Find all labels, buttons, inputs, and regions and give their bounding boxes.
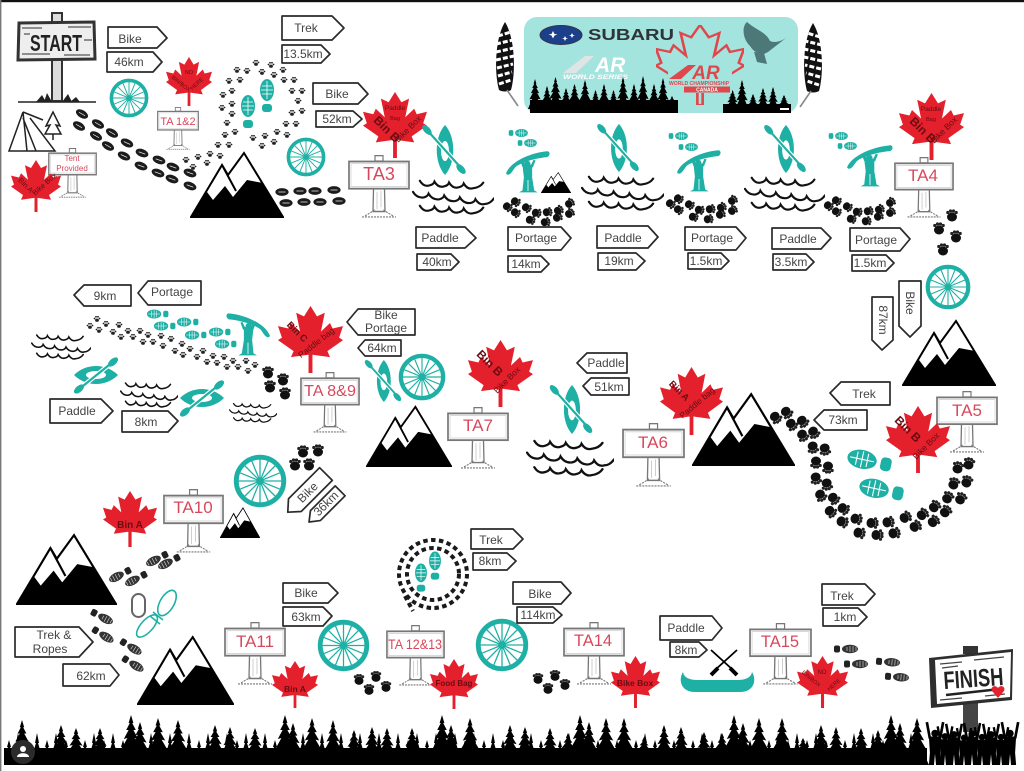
sign: paddle [416, 227, 476, 248]
mountain [137, 637, 234, 705]
maple leaf: bike box [611, 656, 660, 708]
logo banner: WORLD SERIES [563, 75, 628, 81]
sign: 1.5km [688, 253, 729, 269]
sign: 114km [517, 607, 562, 623]
TA6 sign: TA6 [638, 433, 668, 452]
sign: portage left: Portage [151, 285, 193, 299]
TA3 sign: TA3 [363, 164, 395, 184]
icon: bike wheel [401, 356, 443, 398]
sign: trek and ropes [15, 627, 93, 657]
sign: bike diagonal [281, 468, 332, 519]
kayak 1 [421, 123, 467, 176]
portager 3 [847, 145, 893, 186]
sign: 9km left [74, 285, 131, 306]
logo banner: CANADA [696, 88, 718, 94]
sign: paddle: Paddle [779, 232, 817, 246]
sign: 62km: 62km [76, 669, 106, 683]
sign: bike: Bike [528, 587, 552, 601]
sign: 51km left [583, 378, 629, 395]
TA4 sign: TA4 [908, 166, 938, 185]
TA14 sign [564, 623, 624, 684]
maple leaf: TA4 bins: Paddle [921, 106, 941, 113]
sign: 52km [316, 111, 362, 127]
small teal prints 3 [829, 132, 857, 150]
sign: trek [822, 584, 875, 605]
TA 8&9 sign [301, 373, 359, 432]
sign: portage [508, 227, 571, 250]
waves [230, 404, 277, 422]
sign: 64km left [358, 340, 401, 356]
TA15 sign [750, 624, 811, 684]
carabiner [132, 594, 145, 617]
bear paw prints [354, 671, 391, 695]
TA 8&9 sign: TA 8&9 [304, 383, 356, 400]
maple leaf: TA7 bins: Bike Box [491, 364, 523, 395]
sign: portage: Portage [691, 231, 733, 245]
icon: teal loop prints [415, 552, 441, 592]
trek loop prints [399, 540, 467, 611]
maple leaf: no bin or box [797, 656, 848, 708]
sign: trek: Trek [479, 533, 504, 547]
maple leaf: TA3 bins [363, 92, 427, 158]
sign: 87km vertical [872, 297, 893, 350]
maple leaf: bin A [272, 661, 318, 708]
sign: paddle: Paddle [604, 231, 642, 245]
kayak 3 [763, 123, 807, 174]
TA 12&13 sign [387, 626, 444, 685]
small teal prints 1 [509, 129, 537, 147]
maple leaf: no bin or box: NO [818, 670, 827, 676]
dark boot prints upper [107, 550, 182, 588]
left feather [496, 22, 518, 106]
maple leaf: no bin or box [166, 57, 212, 106]
sign: trek [282, 16, 344, 40]
icon: tent and tree [9, 112, 61, 151]
sign: bike: Bike [325, 87, 349, 101]
TA 12&13 sign: TA 12&13 [388, 636, 442, 652]
icon: canoe [681, 672, 754, 692]
maple leaf: TA3 bins: Paddle [385, 105, 405, 112]
sign: 1km [823, 608, 867, 626]
sign: bike portage left: Bike [374, 308, 398, 322]
TA4 sign [895, 158, 953, 217]
maple leaf: TA7 bins: Bin B [474, 347, 506, 379]
sign: 36km diagonal [303, 485, 345, 527]
dark boot prints lower [89, 608, 145, 674]
TA5 sign: TA5 [952, 401, 982, 420]
maple leaf: TA3 bins: Bike Box [392, 113, 424, 144]
sign: paddle left [577, 353, 627, 373]
maple leaf: TA4 bins: Bike Box [928, 114, 960, 145]
sign: bike 46km [108, 27, 167, 48]
sign: bike [313, 83, 368, 104]
maple leaf: bike box: Bike Box [617, 678, 653, 688]
start sign: START [30, 30, 82, 56]
waves 1 [413, 181, 494, 214]
sign: 8km: 8km [135, 415, 157, 429]
icon: bike wheel [478, 621, 526, 669]
sign: 13.5km: 13.5km [283, 47, 323, 61]
sign: paddle left: Paddle [587, 356, 625, 370]
mountain [366, 407, 452, 467]
waves [32, 335, 91, 359]
sign: 36km diagonal: 36km [311, 488, 341, 519]
logo banner: WORLD CHAMPIONSHIP [669, 81, 730, 87]
maple leaf: TA4 bins: Bin B [907, 114, 939, 146]
icon: bike wheel [236, 457, 284, 505]
maple leaf: TA8-9 bins: Paddle bag [296, 325, 336, 360]
mountain [190, 153, 284, 218]
dark boot prints to finish [834, 645, 909, 682]
sign: 1.5km: 1.5km [690, 254, 722, 268]
maple leaf: food bag [430, 659, 478, 709]
teal prints mid [147, 309, 236, 349]
logo banner: AR [691, 63, 720, 84]
TA7 sign [448, 408, 508, 468]
maple leaf: bin A bike box: Bin A [16, 176, 35, 195]
small mountain [220, 508, 260, 538]
sign: trek and ropes: Ropes [33, 642, 67, 656]
paw trail mid [87, 316, 258, 374]
sign: 51km left: 51km [594, 380, 624, 394]
sign: paddle [660, 616, 722, 640]
maple leaf: bin A bike box [11, 160, 61, 212]
sign: trek left: Trek [852, 387, 877, 401]
finish sign: FINISH [943, 663, 1004, 695]
TA3 sign [349, 156, 409, 217]
maple leaf: no bin or box: BIN/BOX [800, 670, 821, 689]
TA5 sign [937, 392, 997, 452]
bear paw prints [533, 670, 570, 694]
sign: 1.5km: 1.5km [854, 256, 886, 270]
maple leaf: bin A: Bin A [284, 684, 306, 694]
paw arc 2 [664, 192, 739, 224]
sign: 3.5km [773, 254, 814, 270]
sign: bike portage left: Portage [365, 321, 407, 335]
paw arc 3 [822, 194, 897, 226]
sign: paddle [772, 228, 831, 249]
maple leaf: TA5 bins: Bike Box [910, 430, 942, 461]
maple leaf: TA7 bins [468, 340, 533, 407]
maple leaf: bin A bike box: Bike Box [30, 171, 59, 197]
TA10 sign: TA10 [173, 498, 213, 517]
finish sign [929, 646, 1013, 732]
sign: 8km [473, 553, 516, 570]
TA11 sign: TA11 [236, 632, 274, 651]
bear paw prints [262, 366, 291, 400]
maple leaf: TA3 bins: Bin B [371, 113, 403, 145]
logo banner: SUBARU [588, 27, 674, 44]
sign: 63km [283, 607, 332, 626]
sign: 3.5km: 3.5km [775, 255, 807, 269]
sign: 8km: 8km [675, 643, 697, 657]
portager facing reverse [226, 313, 270, 355]
sign: trek [471, 529, 523, 549]
sign: 9km left: 9km [94, 289, 116, 303]
maple leaf: food bag: Food Bag [436, 679, 473, 688]
boot print trail [71, 107, 198, 192]
maple leaf: TA6 bins: Bin A [666, 379, 691, 404]
TA7 sign: TA7 [463, 416, 493, 435]
portager 1 [506, 151, 550, 192]
sign: 62km [63, 664, 119, 686]
sign: 1.5km [852, 255, 894, 271]
maple leaf: TA4 bins [899, 93, 964, 160]
sign: bike portage left [347, 308, 415, 335]
sign: 8km [122, 411, 178, 432]
icon: bike wheel [320, 622, 367, 669]
sign: trek: Trek [294, 21, 319, 35]
sign: portage [685, 227, 746, 250]
maple leaf: TA8-9 bins [278, 306, 343, 373]
sign: portage: Portage [855, 233, 897, 247]
maple leaf: TA5 bins [886, 406, 950, 473]
sign: portage left [138, 281, 201, 305]
sign: 87km vertical: 87km [876, 305, 890, 335]
sign: distance 46km [107, 52, 162, 72]
start sign [18, 13, 96, 102]
TA15 sign: TA15 [761, 633, 799, 651]
mountain [902, 321, 996, 386]
boot prints to TA3 [275, 186, 346, 207]
paw arc 1 [501, 195, 576, 227]
sign: portage: Portage [515, 231, 557, 245]
sign: bike vertical [899, 281, 921, 337]
icon: bike wheel [111, 80, 147, 116]
kayak [363, 359, 403, 403]
tent provided sign: Tent [64, 154, 80, 163]
small mountain [541, 173, 571, 193]
profile icon badge [11, 740, 35, 764]
TA10 sign [164, 490, 223, 552]
sign: trek and ropes: Trek & [37, 628, 71, 642]
maple leaf: no bin or box: NO [185, 70, 194, 76]
TA 1&2 sign: TA 1&2 [160, 116, 196, 128]
bear paw prints [289, 444, 324, 470]
treeline [4, 715, 929, 765]
sign: paddle [597, 226, 658, 248]
sign: 52km: 52km [322, 112, 352, 126]
sign: paddle: Paddle [667, 621, 705, 635]
right feather [800, 23, 822, 107]
sign: bike diagonal: Bike [294, 479, 321, 506]
TA 1&2 sign [158, 107, 198, 149]
sign: 19km [598, 253, 645, 270]
small teal prints 2 [669, 132, 698, 151]
sign: bike 46km: Bike [118, 32, 142, 46]
maple leaf: TA5 bins: Bin B [892, 413, 924, 445]
maple leaf: TA8-9 bins: Bin C [284, 320, 310, 345]
icon: crossed paddles [711, 650, 737, 675]
sign: bike [513, 582, 571, 604]
sign: paddle [50, 399, 113, 423]
maple leaf: TA4 bins: Bag [926, 117, 936, 123]
waves [121, 383, 178, 407]
sign: 63km: 63km [291, 610, 321, 624]
paw print loop [183, 60, 305, 170]
sign: 1km: 1km [834, 610, 856, 624]
sign: trek: Trek [830, 589, 855, 603]
maple leaf: no bin or box: BIN/BOX [170, 75, 192, 94]
bear track loop [767, 404, 976, 541]
TA11 sign [225, 623, 285, 684]
sign: portage [850, 228, 910, 251]
sign: 64km left: 64km [367, 341, 397, 355]
sign: bike: Bike [294, 586, 318, 600]
portager 2 [677, 150, 721, 191]
sign: 114km: 114km [520, 608, 556, 622]
horizontal kayak [72, 356, 120, 395]
icon: large teal prints [846, 447, 905, 504]
waves 2 [582, 177, 664, 210]
sign: 40km [417, 254, 459, 270]
sign: 8km: 8km [479, 554, 501, 568]
sign: 13.5km [282, 45, 330, 63]
sign: distance 46km: 46km [114, 55, 144, 69]
mountain [16, 535, 117, 605]
kayak 2 [596, 122, 640, 173]
maple leaf: bin A: Bin A [117, 520, 143, 531]
sign: 19km: 19km [604, 254, 634, 268]
sign: 14km: 14km [511, 257, 541, 271]
icon: teal boot prints [241, 79, 274, 128]
maple leaf: no bin or box: HERE [190, 77, 205, 92]
maple leaf: bin A [103, 491, 157, 547]
sign: 14km [508, 256, 549, 272]
sign: trek left [830, 382, 890, 405]
sign: 8km [670, 642, 707, 657]
rope [133, 587, 180, 640]
tent provided sign: Provided [56, 164, 88, 173]
sign: paddle: Paddle [421, 231, 459, 245]
maple leaf: TA3 bins: Bag [390, 116, 400, 122]
sign: 73km left: 73km [828, 413, 858, 427]
bear paw prints [933, 209, 962, 256]
sign: 40km: 40km [422, 255, 452, 269]
maple leaf: TA6 bins: Paddle bag [677, 385, 717, 420]
TA6 sign [623, 424, 684, 486]
TA14 sign: TA14 [574, 632, 612, 650]
cheering crowd [927, 722, 1018, 765]
waves [527, 441, 614, 475]
sign: bike [283, 583, 338, 603]
icon: bike wheel [928, 267, 968, 307]
sign: bike vertical: Bike [903, 291, 917, 315]
logo banner [524, 17, 798, 113]
horizontal kayak [178, 379, 226, 418]
tent provided sign [49, 149, 96, 197]
sign: 73km left [814, 410, 867, 430]
maple leaf: no bin or box: HERE [827, 678, 842, 693]
kayak [548, 383, 594, 435]
logo banner: AR [594, 54, 626, 77]
sign: paddle: Paddle [58, 404, 96, 418]
mountain [692, 394, 795, 466]
waves 3 [745, 178, 825, 211]
maple leaf: TA6 bins [660, 367, 723, 435]
icon: bike wheel [288, 139, 324, 175]
